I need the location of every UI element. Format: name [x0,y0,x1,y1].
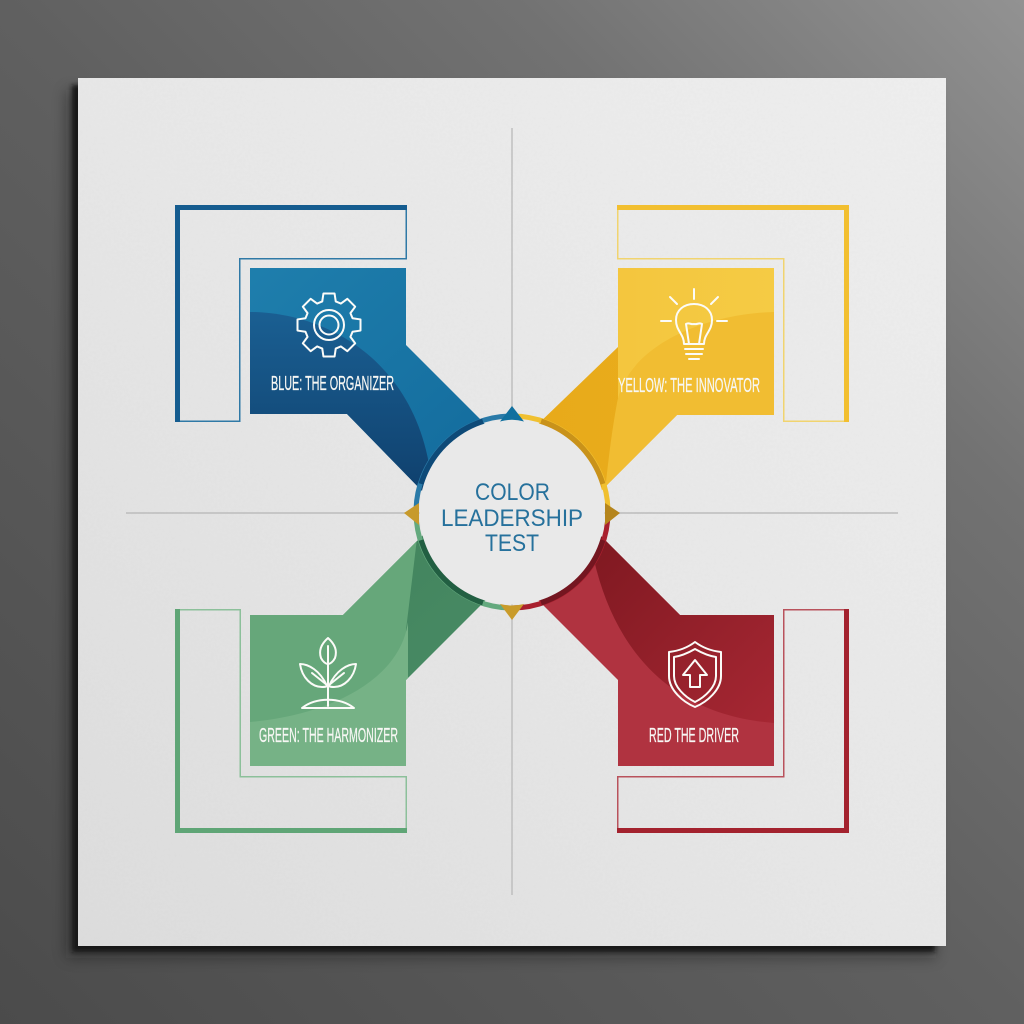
blue label: BLUE: THE ORGANIZER [271,373,394,395]
blue card with connector [250,268,485,491]
red label: RED THE DRIVER [649,725,739,747]
panel: green [175,530,500,833]
title: TEST [485,530,539,557]
green frame [175,609,407,833]
title [441,479,583,557]
ring shade: blue [422,422,483,484]
yellow frame thick edge [617,205,849,422]
marker: right [605,503,620,525]
paper grain [78,78,946,946]
ring: red segment [512,512,608,608]
horizontal divider [126,512,898,514]
green frame thick edge [175,609,407,833]
blue frame [175,205,407,422]
ring shade: yellow [541,422,602,484]
panel: red [530,530,849,833]
ring shade: green [422,540,483,602]
marker: top [500,406,524,422]
ring shade: red [541,540,602,602]
red frame [617,609,849,833]
yellow label: YELLOW: THE INNOVATOR [618,375,760,397]
icon: sprout [300,638,356,708]
center badge [404,406,620,620]
panel: yellow [530,205,849,500]
title: LEADERSHIP [441,505,583,532]
ring: green segment [416,512,512,608]
green label: GREEN: THE HARMONIZER [259,725,398,747]
vertical divider [511,128,513,895]
icon: shield with arrow [669,642,721,707]
paper wide shadow [66,90,936,958]
red card with connector [530,530,780,770]
blue frame thick edge [175,205,407,422]
title: COLOR [475,479,550,506]
marker: bottom [500,604,524,620]
ring: blue segment [416,416,512,512]
paper sheet [78,78,946,946]
green card with connector [250,536,486,766]
panel: blue [175,205,500,500]
icon: light bulb [661,289,727,359]
paper shadow [72,85,935,952]
icon: gear [298,294,360,356]
red frame thick edge [617,609,849,833]
yellow card with connector [538,268,774,490]
ring: yellow segment [512,416,608,512]
marker: left [404,503,419,525]
center circle [420,420,604,604]
yellow frame [617,205,849,422]
